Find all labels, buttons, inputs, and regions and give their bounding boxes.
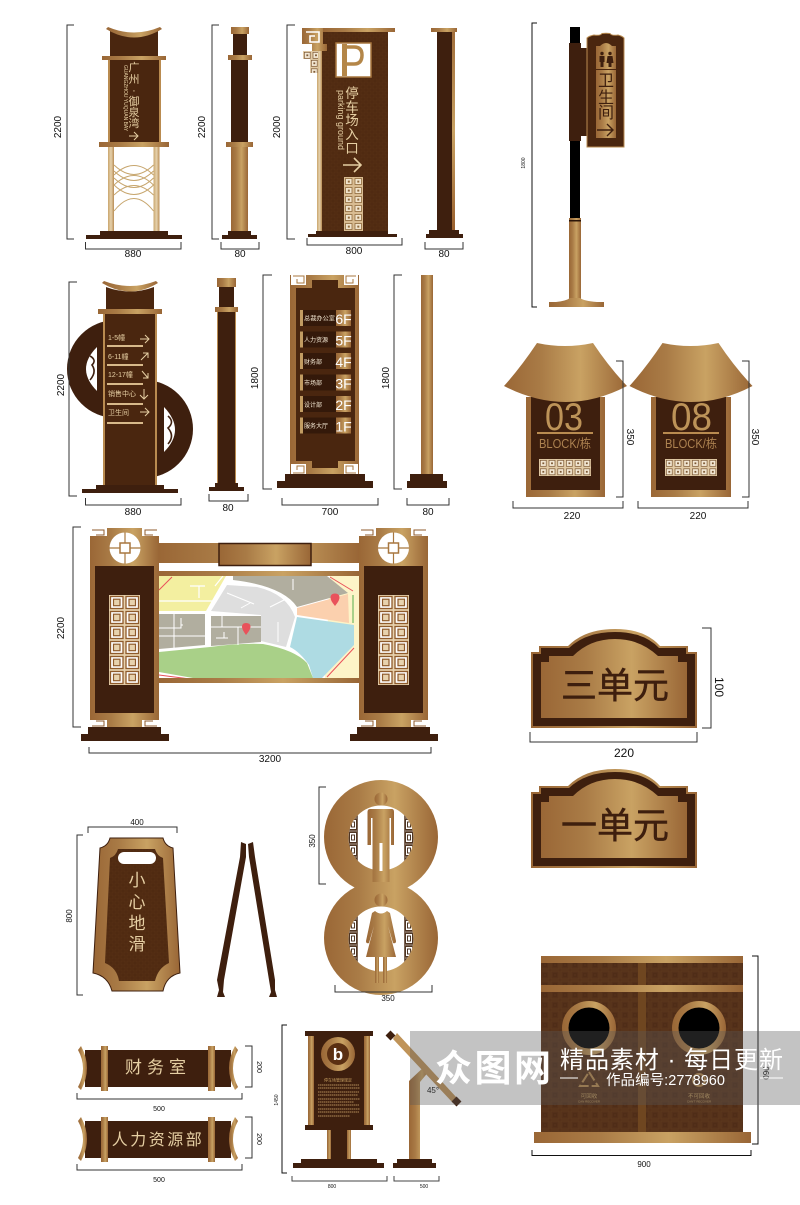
sign: notice board <box>293 1031 384 1168</box>
sign: caution wet floor: 心 <box>128 893 146 912</box>
dimension: 1800 and 80 <box>381 275 449 518</box>
dimension: 800 and 400: 800 <box>65 909 74 923</box>
dimension: 80: 80 <box>438 249 450 260</box>
dimension: 1800 and 700: 1800 <box>250 366 261 389</box>
icon: corner meander <box>302 28 327 73</box>
sign: restroom hanging pole: 卫 <box>598 73 614 90</box>
map gate <box>81 528 438 741</box>
icon: roof <box>504 343 627 402</box>
dimension: 900 and 960: 960 <box>761 1066 770 1080</box>
dimension: 2200 and 80: 2200 <box>197 115 208 138</box>
dimension: 900 and 960 <box>532 956 770 1169</box>
dimension: 350 and 220: 350 <box>624 429 635 446</box>
icon: map pins <box>242 594 340 635</box>
icon: lens cutouts <box>86 347 175 452</box>
floor rows: 人力资源 <box>304 336 328 344</box>
icon: man <box>348 792 414 882</box>
watermark band: 作品编号:2778960 <box>606 1072 725 1089</box>
floor rows: 4F <box>335 354 352 370</box>
door sign: HR: 人力资源部 <box>112 1131 204 1149</box>
sign: side pillar 2 <box>426 28 463 238</box>
sign: caution wet floor: 地 <box>128 914 146 933</box>
dimension: 500 and 200: 500 <box>153 1177 165 1184</box>
sign: caution side view <box>217 842 277 997</box>
plaque: unit one: 一单元 <box>561 805 669 846</box>
floor rows: 总裁办公室 <box>304 314 335 322</box>
floor rows: 1F <box>335 418 352 434</box>
icon: right opening <box>672 1001 726 1055</box>
dimension: 350 and 350: 350 <box>308 834 317 848</box>
dimension: 500 and 45 degrees: 500 <box>420 1184 428 1190</box>
sign: Guangzhou Yuquan Bay totem: GUANGZHOU YUQUAN BAY <box>122 65 128 132</box>
dimension: 800 and 400: 400 <box>130 818 144 827</box>
dimension: 2200 and 80 <box>197 25 259 260</box>
door sign: finance: 财务室 <box>125 1058 191 1077</box>
sign: block 03: BLOCK/栋 <box>539 436 591 451</box>
icon: woman <box>348 894 414 983</box>
dimension: 2000 and 800 <box>272 25 402 257</box>
dimension: 350 and 220 <box>638 361 760 522</box>
dimension: 1450 and 800: 800 <box>328 1184 336 1190</box>
sign: side pole <box>407 275 447 488</box>
dimension: 2200 and 80: 80 <box>234 249 246 260</box>
sign: Guangzhou Yuquan Bay totem: 州 <box>128 74 140 86</box>
sign: restroom hanging pole: 生 <box>598 89 614 107</box>
floor rows <box>300 310 352 434</box>
floor rows: 市场部 <box>304 379 322 387</box>
sign: parking entrance: 场 <box>345 113 359 128</box>
dimension: 350 and 220: 220 <box>564 511 581 522</box>
directory rows <box>107 333 149 424</box>
watermark band <box>410 1031 800 1105</box>
dimension: 1800 <box>521 23 537 307</box>
dimension: 2200 and 880 <box>53 25 181 260</box>
sign: parking entrance: parking ground <box>336 90 346 150</box>
sign: Guangzhou Yuquan Bay totem <box>86 27 182 239</box>
floor rows: 5F <box>335 332 352 348</box>
sign: Guangzhou Yuquan Bay totem: 湾 <box>128 116 140 130</box>
icon: roof <box>630 343 752 402</box>
icon: recyclable: CAN RECOVER <box>578 1100 601 1104</box>
sign: notice board side view <box>386 1031 461 1168</box>
dimension: 500 and 45 degrees <box>394 1086 439 1190</box>
dimension: 2000 and 800: 800 <box>346 246 363 257</box>
floor rows: 设计部 <box>304 401 322 409</box>
dimension: 1800 and 80: 1800 <box>381 366 392 389</box>
door sign: HR <box>78 1117 238 1162</box>
sign: parking entrance: 车 <box>345 99 359 115</box>
recycling bin <box>534 956 751 1143</box>
dimension: 900 and 960: 900 <box>637 1160 651 1169</box>
sign: Guangzhou Yuquan Bay totem: · <box>132 85 136 97</box>
floor rows: 6F <box>335 311 352 327</box>
left pillar <box>81 528 169 741</box>
dimension: 2200 and 3200: 3200 <box>259 754 282 765</box>
dimension: 2200 and 880: 880 <box>125 249 142 260</box>
icon: recyclable <box>578 1072 601 1104</box>
floor rows: 财务部 <box>304 358 322 366</box>
dimension: 350 and 350: 350 <box>381 994 395 1003</box>
beam and plaque <box>159 543 359 683</box>
plaque: unit three <box>531 629 697 728</box>
directory rows: 卫生间 <box>108 408 129 417</box>
dimension: 2200 and 880 <box>56 282 181 518</box>
floor rows: 2F <box>335 397 352 413</box>
sign: block 08: BLOCK/栋 <box>665 436 717 451</box>
sign: caution wet floor: 小 <box>128 871 146 890</box>
dimension: 1800: 1800 <box>521 157 527 169</box>
dimension: 350 and 220: 220 <box>690 511 707 522</box>
dimension: 1800 and 700 <box>250 275 378 518</box>
floor rows: 服务大厅 <box>304 422 328 430</box>
icon: logo ring: b <box>333 1045 343 1064</box>
icon: left opening <box>562 1001 616 1055</box>
directory rows: 12-17幢 <box>108 370 133 379</box>
dimension: 350 and 350 <box>308 787 432 1003</box>
dimension: 500 and 200 <box>77 1117 262 1184</box>
sign: restroom hanging pole <box>549 27 624 307</box>
dimension: 350 and 220 <box>513 361 635 522</box>
notice text: 停车场管理规定 <box>324 1076 352 1082</box>
dimension: 1450 and 800 <box>274 1025 387 1190</box>
dimension: 500 and 200: 500 <box>153 1106 165 1113</box>
dimension: 80: 80 <box>222 503 234 514</box>
directory rows: 1-5幢 <box>108 333 125 342</box>
dimension: 800 and 400 <box>65 818 177 995</box>
dimension: 500 and 200: 200 <box>255 1061 262 1073</box>
sign: Guangzhou Yuquan Bay totem: 泉 <box>128 105 140 119</box>
door sign: finance <box>78 1046 238 1091</box>
dimension: 220 and 100 <box>530 628 726 760</box>
directory rows: 销售中心 <box>108 389 136 398</box>
sign: parking entrance: 入 <box>345 127 359 142</box>
icon: non-recyclable: CAN'T RECOVER <box>687 1100 712 1104</box>
dimension: 1800 and 700: 700 <box>322 507 339 518</box>
dimension: 1800 and 80: 80 <box>422 507 434 518</box>
sign: caution wet floor <box>93 838 180 991</box>
icon: parking P <box>336 43 371 77</box>
sign: floor directory <box>277 275 373 488</box>
dimension: 350 and 220: 350 <box>749 429 760 446</box>
dimension: 500 and 200 <box>77 1046 262 1113</box>
map <box>159 576 359 679</box>
sign: block 08 <box>630 343 752 497</box>
icon: non-recyclable <box>687 1074 712 1104</box>
watermark band: 众图网 <box>435 1048 551 1089</box>
dimension: 2200 and 3200: 2200 <box>56 616 67 639</box>
dimension: 2200 and 880: 2200 <box>56 373 67 396</box>
dimension: 500 and 45 degrees: 45° <box>427 1086 439 1095</box>
sign: restroom rings <box>324 780 438 995</box>
sign: block 08: 08 <box>671 396 712 439</box>
dimension: 2000 and 800: 2000 <box>272 115 283 138</box>
sign: side pillar 3 <box>209 278 244 491</box>
dimension: 220 and 100: 100 <box>712 677 726 697</box>
dimension: 2200 and 880: 880 <box>125 507 142 518</box>
sign: caution wet floor: 滑 <box>128 935 146 954</box>
right pillar <box>350 528 438 741</box>
sign: parking entrance <box>302 28 397 237</box>
watermark band: 精品素材 · 每日更新 <box>560 1047 783 1074</box>
dimension: 80 <box>209 494 248 514</box>
sign: Guangzhou Yuquan Bay totem: 广 <box>128 62 140 74</box>
floor rows: 3F <box>335 376 352 392</box>
dimension: 1450 and 800: 1450 <box>274 1094 280 1106</box>
directory rows: 6-11幢 <box>108 352 128 361</box>
dimension: 500 and 200: 200 <box>255 1133 262 1145</box>
sign: block 03 <box>504 343 627 497</box>
sign: directional with circles <box>67 281 193 493</box>
sign: parking entrance: 停 <box>345 86 359 101</box>
dimension: 220 and 100: 220 <box>614 746 634 760</box>
sign: block 03: 03 <box>545 396 583 439</box>
plaque: unit one <box>531 769 697 868</box>
icon: non-recyclable: 不可回收 <box>688 1092 710 1100</box>
dimension: 2200 and 3200 <box>56 527 431 765</box>
sign: Guangzhou Yuquan Bay totem: 御 <box>128 94 140 108</box>
sign: restroom hanging pole: 间 <box>598 104 614 122</box>
icon: restroom figures <box>600 52 614 67</box>
dimension: 2200 and 880: 2200 <box>53 115 64 138</box>
dimension: 80 <box>425 242 463 260</box>
icon: recyclable: 可回收 <box>581 1092 598 1100</box>
sign: parking entrance: 口 <box>345 141 359 156</box>
sign: side pillar 1 <box>222 27 257 239</box>
plaque: unit three: 三单元 <box>561 665 669 706</box>
